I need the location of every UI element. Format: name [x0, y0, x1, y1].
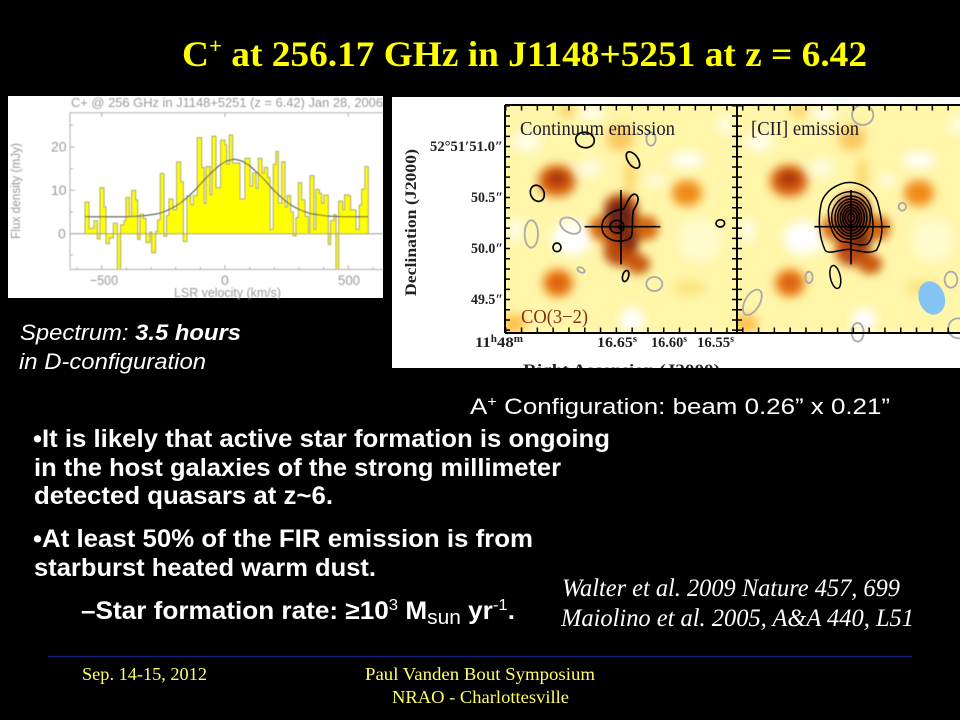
- x-axis labels: [90, 272, 360, 300]
- icon: beam ellipse: [918, 281, 946, 315]
- caption: beam configuration: Configuration: beam 0.26” x 0.21”: [497, 394, 890, 419]
- text block: bullet 1: [33, 425, 610, 510]
- heat map: CII: [732, 100, 960, 340]
- text block: star formation rate: M: [398, 597, 427, 625]
- heat map: continuum: [506, 106, 736, 332]
- right ascension axis labels: Right Ascension (J2000): [523, 362, 720, 379]
- map labels: [520, 118, 859, 328]
- text block: star formation rate: sun: [427, 607, 461, 629]
- right ascension axis labels: h: [491, 334, 497, 345]
- map labels: Continuum emission: [520, 118, 675, 140]
- y-axis labels: [8, 138, 67, 242]
- right ascension axis labels: s: [633, 334, 637, 345]
- declination axis labels: 50.0″: [471, 241, 503, 257]
- title: C: [182, 34, 208, 74]
- right ascension axis labels: 16.65: [597, 335, 631, 351]
- declination axis labels: 52°51′51.0″: [430, 139, 503, 155]
- text block: bullet 1: in the host galaxies of the strong millimeter: [34, 454, 561, 482]
- declination axis labels: Declination (J2000): [403, 149, 420, 296]
- right ascension axis labels: 16.55: [697, 335, 731, 351]
- text block: star formation rate: [81, 597, 515, 629]
- text block: star formation rate: -1: [493, 597, 508, 614]
- y-axis labels: 0: [58, 226, 66, 242]
- declination axis labels: 49.5″: [471, 292, 503, 308]
- footer: event and venue: [365, 664, 595, 707]
- x-axis labels: 0: [221, 272, 229, 288]
- footer: date: Sep. 14-15, 2012: [82, 664, 207, 684]
- chart axes and ticks: [70, 113, 383, 270]
- panel: spectrum chart: [8, 95, 383, 300]
- map labels: CO(3−2): [521, 306, 588, 328]
- footer: event and venue: Paul Vanden Bout Symposium: [365, 664, 595, 684]
- footer: event and venue: NRAO - Charlottesville: [392, 687, 569, 707]
- text block: star formation rate: .: [508, 597, 515, 625]
- references: [560, 575, 914, 632]
- right ascension axis labels: s: [730, 334, 734, 345]
- histogram bars: [70, 135, 383, 273]
- x-axis labels: LSR velocity (km/s): [174, 285, 281, 300]
- title: +: [209, 33, 222, 58]
- panel: emission maps: [392, 97, 960, 379]
- references: Maiolino et al. 2005, A&A 440, L51: [560, 605, 914, 632]
- caption: spectrum: in D-configuration: [19, 349, 206, 374]
- text block: bullet 1: detected quasars at z~6.: [34, 482, 333, 510]
- chart title: C+ @ 256 GHz in J1148+5251 (z = 6.42) Jan 28, 2006: [71, 95, 383, 110]
- text block: bullet 2: •At least 50% of the FIR emission is from: [33, 525, 533, 553]
- text block: bullet 2: starburst heated warm dust.: [34, 554, 376, 582]
- x-axis labels: 500: [338, 272, 360, 288]
- contours: continuum: [525, 131, 725, 291]
- map frames and ticks: [505, 105, 960, 333]
- right ascension axis labels: m: [514, 334, 524, 345]
- caption: spectrum: [19, 320, 241, 374]
- right ascension axis labels: 11: [475, 335, 489, 351]
- contours: CII: [739, 105, 960, 342]
- caption: beam configuration: +: [487, 393, 497, 409]
- gaussian fit curve: [85, 159, 368, 217]
- references: Walter et al. 2009 Nature 457, 699: [562, 575, 900, 602]
- declination axis labels: 50.5″: [471, 190, 503, 206]
- map labels: [CII] emission: [751, 118, 859, 140]
- text block: star formation rate: yr: [461, 597, 493, 625]
- caption: beam configuration: A: [470, 394, 485, 419]
- x-axis labels: −500: [90, 272, 118, 288]
- right ascension axis labels: s: [683, 334, 687, 345]
- right ascension axis labels: [476, 334, 734, 368]
- y-axis labels: 20: [51, 138, 67, 154]
- y-axis labels: 10: [51, 182, 67, 198]
- text block: bullet 2: [33, 525, 533, 582]
- text block: star formation rate: 3: [389, 597, 398, 614]
- caption: spectrum: Spectrum: 3.5 hours: [20, 320, 241, 345]
- declination axis labels: [403, 139, 503, 308]
- text block: bullet 1: •It is likely that active star formation is ongoing: [33, 425, 610, 453]
- title: at 256.17 GHz in J1148+5251 at z = 6.42: [222, 34, 867, 74]
- right ascension axis labels: 16.60: [651, 335, 685, 351]
- text block: star formation rate: –Star formation rate: ≥10: [81, 597, 375, 625]
- right ascension axis labels: 48: [497, 335, 514, 351]
- y-axis labels: Flux density (mJy): [8, 143, 23, 239]
